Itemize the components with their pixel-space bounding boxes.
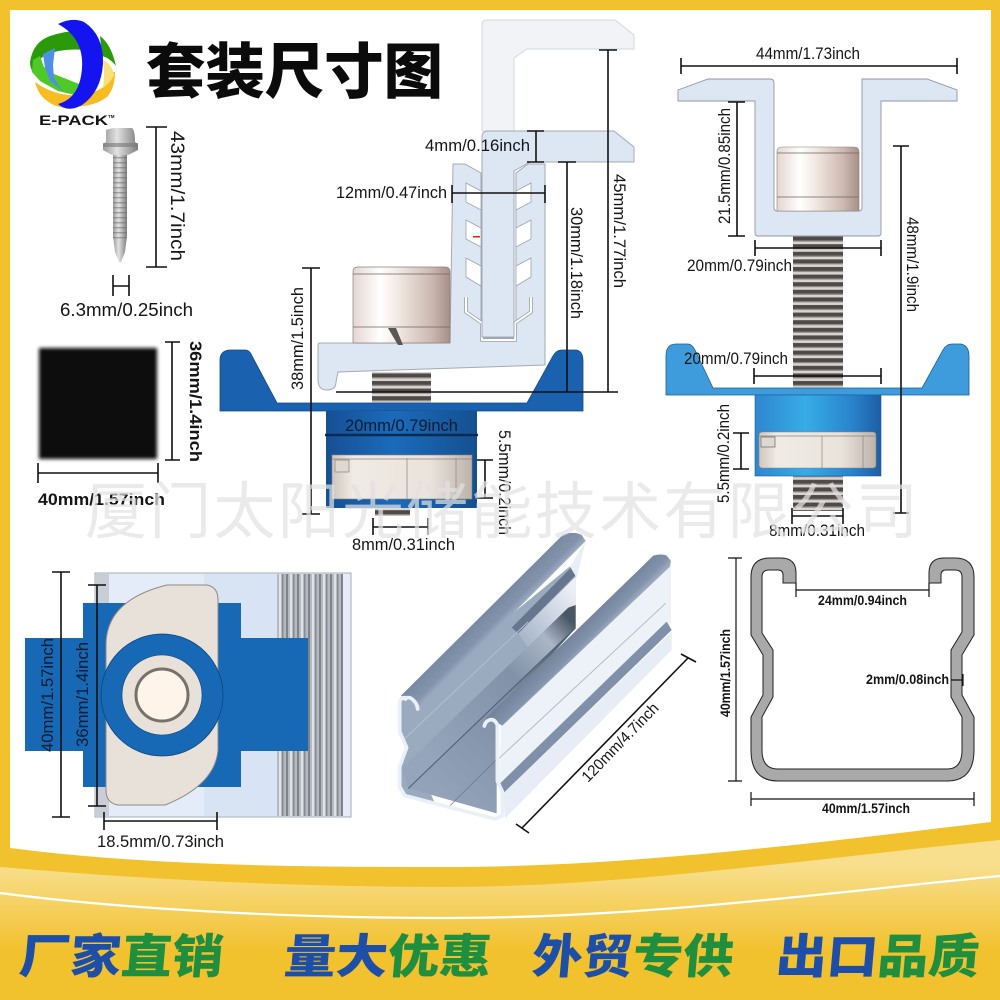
lower inner wall xyxy=(402,605,576,788)
dimension: pad width xyxy=(38,463,158,483)
dimension: 18.5mm xyxy=(104,812,217,830)
label: 38mm: 38mm/1.5inch xyxy=(289,287,307,390)
clamp slot pockets xyxy=(466,183,531,286)
label: 5.5mm: 5.5mm/0.2inch xyxy=(495,430,513,535)
label: 40mm: 40mm/1.57inch xyxy=(39,638,57,752)
blue rail wings xyxy=(666,344,969,395)
hex cap nut xyxy=(353,267,450,345)
label: 48mm: 48mm/1.9inch xyxy=(903,217,921,312)
label: wall thickness: 2mm/0.08inch xyxy=(866,672,949,687)
blue lower block xyxy=(755,395,881,476)
threaded bolt lower xyxy=(793,476,843,511)
clamp upper arm xyxy=(482,131,634,337)
dimension: 40mm height xyxy=(728,558,742,781)
logo: wordmark: E-PACK xyxy=(39,112,108,128)
label: 45mm: 45mm/1.77inch xyxy=(610,174,628,288)
black pad xyxy=(39,348,157,459)
rail mid tone xyxy=(204,574,277,816)
footer white curve xyxy=(0,876,1000,918)
label: 43mm: 43mm/1.7inch xyxy=(166,131,187,261)
logo: green swoosh xyxy=(30,31,116,72)
ghost upper clamp position xyxy=(482,20,634,131)
rail base xyxy=(95,573,351,817)
outer wall crease xyxy=(498,603,666,759)
dimension: 20mm xyxy=(325,434,478,436)
square nut xyxy=(332,455,472,499)
back lip end xyxy=(570,541,586,578)
logo: trademark: TM xyxy=(108,114,115,119)
dimension: 21.5mm xyxy=(728,102,745,236)
slot outline grey xyxy=(466,297,531,340)
blue bracket xyxy=(25,603,308,787)
cap nut xyxy=(777,147,859,211)
label: 20mm upper: 20mm/0.79inch xyxy=(687,257,792,275)
logo: blue crescent xyxy=(58,20,103,109)
dimension: 40mm width xyxy=(751,792,974,806)
dimension: 8mm xyxy=(792,508,843,524)
slot outline white xyxy=(466,297,531,340)
dimension: wall thickness xyxy=(951,674,963,686)
panel: self-drilling screw xyxy=(60,127,193,320)
label: 36mm: 36mm/1.4inch xyxy=(186,341,205,462)
footer slogans xyxy=(17,918,983,987)
dimension: 30mm xyxy=(558,162,576,392)
label: 24mm: 24mm/0.94inch xyxy=(818,593,907,608)
logo: pale yellow swoosh xyxy=(103,60,114,88)
panel: end clamp assembly xyxy=(220,20,634,554)
label: 36mm: 36mm/1.4inch xyxy=(74,642,92,747)
upper outer wall xyxy=(499,565,671,783)
bolt end xyxy=(375,508,410,516)
label: 12mm: 12mm/0.47inch xyxy=(336,184,447,202)
square nut xyxy=(759,432,876,468)
back lip xyxy=(401,533,586,708)
dimension: 20mm lower xyxy=(754,368,881,384)
blue lower block xyxy=(326,411,477,508)
dimension: 45mm xyxy=(599,50,617,392)
dimension: 24mm xyxy=(796,583,929,597)
slogan: export supply: 外贸专供 xyxy=(530,918,737,987)
wall highlight line xyxy=(405,622,528,738)
panel: black square pad xyxy=(38,341,205,509)
label: 5.5mm: 5.5mm/0.2inch xyxy=(715,404,733,503)
label: 44mm: 44mm/1.73inch xyxy=(756,45,860,63)
clamp body xyxy=(318,164,545,390)
panel: rail perspective view xyxy=(400,533,696,833)
label: 40mm: 40mm/1.57inch xyxy=(38,490,165,509)
dimension: 38mm xyxy=(302,268,320,514)
dimension: 48mm xyxy=(893,146,909,513)
blue rail wings xyxy=(220,350,583,411)
screw body xyxy=(103,128,138,262)
washer centre xyxy=(122,655,202,735)
label: 8mm: 8mm/0.31inch xyxy=(352,536,455,554)
logo: E-PACK xyxy=(30,20,116,128)
logo: light blue swoosh xyxy=(43,48,63,91)
label: 20mm: 20mm/0.79inch xyxy=(345,417,458,435)
label: 21.5mm: 21.5mm/0.85inch xyxy=(716,108,734,224)
dimension: 5.5mm xyxy=(477,460,493,498)
label: 120mm: 120mm/4.7inch xyxy=(579,700,662,786)
rail floor xyxy=(408,628,576,813)
rail ribs xyxy=(277,574,343,816)
cavity back wall xyxy=(405,565,576,788)
bolt hole xyxy=(136,669,188,721)
label: 40mm width: 40mm/1.57inch xyxy=(822,801,910,816)
dimension: 5.5mm xyxy=(733,433,749,469)
red mark xyxy=(473,236,480,238)
lower outer wall xyxy=(503,632,672,818)
label: 30mm: 30mm/1.18inch xyxy=(567,207,585,319)
slogan: export quality: 出口品质 xyxy=(774,918,983,987)
floor crease xyxy=(450,760,496,806)
dimension: 4mm xyxy=(527,131,544,162)
logo: yellow swoosh xyxy=(35,72,115,108)
front face backing xyxy=(400,698,435,803)
panel: mid clamp assembly xyxy=(666,45,969,540)
logo: bright green swoosh xyxy=(32,56,79,96)
beige nut plate xyxy=(106,585,218,805)
dimension: pad height xyxy=(165,342,180,460)
label: 4mm: 4mm/0.16inch xyxy=(425,137,530,155)
threaded bolt xyxy=(372,372,431,403)
dimension: 20mm upper xyxy=(755,240,881,256)
dimension: 120mm xyxy=(516,654,696,833)
footer light band xyxy=(0,840,1000,1000)
front lip xyxy=(486,554,671,726)
section profile xyxy=(751,558,974,781)
outer groove xyxy=(500,622,672,793)
panel: top view of clamp on rail xyxy=(25,572,351,851)
label: 8mm: 8mm/0.31inch xyxy=(769,522,865,540)
hat clamp profile xyxy=(678,79,957,236)
label: 6.3mm: 6.3mm/0.25inch xyxy=(60,300,193,320)
reference baseline xyxy=(336,391,618,393)
dimension: 44mm xyxy=(681,58,957,74)
rail body xyxy=(400,533,672,819)
panel: rail cross section xyxy=(718,558,974,816)
slogan: bulk discount: 量大优惠 xyxy=(282,918,495,987)
label: 20mm lower: 20mm/0.79inch xyxy=(684,350,788,368)
watermark: 厦门太阳光储能技术有限公司 xyxy=(85,461,918,551)
dimension: screw diameter xyxy=(113,275,129,296)
floor fold line xyxy=(408,628,575,788)
dimension: 40mm xyxy=(52,572,70,817)
dimension: 12mm xyxy=(452,185,545,203)
lit wall end xyxy=(518,577,576,648)
washer ring xyxy=(101,634,223,756)
label: 40mm height: 40mm/1.57inch xyxy=(718,629,733,717)
front profile rim xyxy=(400,698,502,819)
threaded bolt upper xyxy=(793,236,843,388)
dimension: 8mm xyxy=(373,518,428,535)
title: 套装尺寸图 xyxy=(146,24,443,111)
slogan: factory direct: 厂家直销 xyxy=(17,918,227,987)
wall groove xyxy=(512,568,576,633)
dimension: 36mm xyxy=(88,585,106,806)
dimension: screw length xyxy=(146,127,167,267)
label: 18.5mm: 18.5mm/0.73inch xyxy=(97,833,224,851)
rail left edge xyxy=(95,574,109,816)
